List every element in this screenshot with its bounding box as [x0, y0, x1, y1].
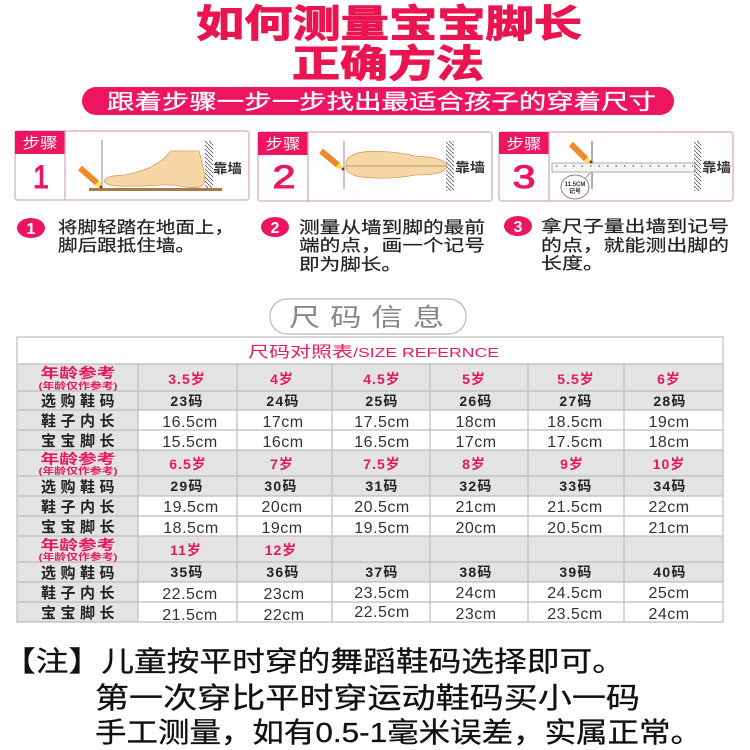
- table block 1 values: 26码: [459, 393, 493, 409]
- table block 2 values: 19.5cm: [354, 520, 410, 537]
- row labels: 鞋子内长: [41, 499, 119, 516]
- table block 1 values: 27码: [559, 393, 593, 409]
- table block 2 values: 18.5cm: [163, 520, 219, 537]
- icon: foot side view: [104, 151, 205, 188]
- table block 2 values: 20.5cm: [547, 520, 603, 537]
- table block 1 values: 18cm: [648, 434, 690, 451]
- instruction 2: 2: [271, 220, 280, 237]
- table block 3 values: [162, 542, 690, 624]
- panel: step 3: [499, 132, 733, 201]
- table block 2 values: 33码: [559, 478, 593, 494]
- panel: step 3: 3: [512, 159, 536, 195]
- table block 1 values: 5.5岁: [557, 371, 595, 387]
- footnote: 【注】儿童按平时穿的舞蹈鞋码选择即可。: [3, 646, 625, 677]
- table block 3 values: 24.5cm: [547, 585, 603, 602]
- instruction 3: 长度。: [541, 254, 604, 273]
- panel: step 2: 步骤: [266, 136, 300, 153]
- panel: step 3: 步骤: [506, 136, 542, 153]
- row labels: 选购鞋码: [41, 478, 119, 496]
- table block 2 values: 10岁: [653, 456, 685, 472]
- table block 1 values: 25码: [365, 393, 399, 409]
- table block 3 values: 24cm: [648, 606, 690, 623]
- instruction 1: [17, 218, 234, 255]
- subtitle banner: [82, 87, 674, 115]
- table block 2 values: 21.5cm: [547, 499, 603, 516]
- panel: step 2: 靠墙: [455, 160, 485, 175]
- table block 3 values: 22.5cm: [354, 604, 410, 621]
- panel: step 3: 靠墙: [702, 160, 731, 175]
- icon: measurement callout: [561, 173, 590, 199]
- table block 1 values: 16.5cm: [354, 434, 410, 451]
- icon: pencil: [80, 168, 102, 188]
- row labels: (年龄仅作参考): [38, 380, 118, 391]
- table block 2 values: 31码: [365, 478, 399, 494]
- row labels: (年龄仅作参考): [38, 465, 118, 476]
- table backgrounds: [17, 337, 723, 622]
- table block 2 values: 7岁: [270, 456, 294, 472]
- row labels: 选购鞋码: [41, 392, 119, 410]
- table block 2 values: 22cm: [648, 499, 690, 516]
- table block 1 values: 4岁: [270, 371, 294, 387]
- icon: ruler: [552, 163, 695, 172]
- table block 2 values: 21cm: [648, 520, 690, 537]
- table block 1 values: 24码: [266, 393, 300, 409]
- table block 2 values: 8岁: [462, 456, 486, 472]
- footnote: 第一次穿比平时穿运动鞋码买小一码: [95, 682, 640, 715]
- table block 1 values: 18.5cm: [547, 414, 603, 431]
- title: 正确方法: [292, 44, 484, 86]
- row labels: (年龄仅作参考): [38, 551, 118, 562]
- table block 2 values: 20cm: [261, 499, 303, 516]
- table block 3 values: 22cm: [263, 607, 305, 624]
- table block 2 values: 6.5岁: [169, 456, 207, 472]
- table block 3 values: 23cm: [455, 606, 497, 623]
- icon: foot top view: [346, 151, 447, 178]
- instruction 2: 即为脚长。: [299, 255, 402, 274]
- icon: measurement callout: 记号: [569, 187, 581, 195]
- row labels: 宝宝脚长: [41, 518, 119, 536]
- icon: pencil: [571, 144, 592, 164]
- table block 3 values: 23.5cm: [354, 585, 410, 602]
- table block 2 values: 30码: [264, 478, 298, 494]
- table block 3 values: 35码: [170, 564, 204, 580]
- table block 1 values: 17.5cm: [547, 434, 603, 451]
- table block 1 values: 16.5cm: [162, 414, 218, 431]
- table block 2 values: 19cm: [261, 520, 303, 537]
- row labels: 选购鞋码: [41, 564, 119, 582]
- table block 3 values: 12岁: [265, 542, 297, 558]
- panel: step 2: [258, 132, 492, 201]
- title: 如何测量宝宝脚长: [196, 4, 582, 46]
- table block 2 values: 20cm: [455, 520, 497, 537]
- row labels: 年龄参考: [40, 537, 116, 553]
- panel: step 2: 2: [272, 159, 296, 195]
- instruction 2: 端的点，画一个记号: [299, 236, 485, 255]
- instruction 3: [504, 216, 729, 273]
- instruction 3: 3: [514, 219, 523, 236]
- row labels: 宝宝脚长: [41, 432, 119, 450]
- table block 1 values: 17.5cm: [354, 414, 410, 431]
- row labels: [38, 365, 119, 622]
- table block 2 values: 20.5cm: [354, 499, 410, 516]
- table block 1 values: 17cm: [262, 414, 304, 431]
- table block 1 values: 23码: [170, 393, 204, 409]
- instruction 3: 拿尺子量出墙到记号: [541, 216, 729, 236]
- row labels: 鞋子内长: [41, 413, 119, 430]
- panel: step 1: 步骤: [22, 135, 58, 152]
- table block 1 values: 18cm: [455, 414, 497, 431]
- table block 3 values: 22.5cm: [162, 586, 218, 603]
- table block 3 values: 38码: [459, 564, 493, 580]
- table block 2 values: 34码: [653, 478, 687, 494]
- table block 2 values: 32码: [459, 478, 493, 494]
- table block 3 values: 23cm: [263, 586, 305, 603]
- instruction 1: 1: [27, 221, 36, 238]
- instruction 1: 脚后跟抵住墙。: [58, 236, 195, 255]
- panel: step 1: 1: [33, 159, 49, 195]
- table block 1 values: 4.5岁: [363, 371, 401, 387]
- table block 1 values: 16cm: [262, 434, 304, 451]
- table block 1 values: 19cm: [648, 414, 690, 431]
- icon: pencil: [321, 151, 344, 170]
- size table: [17, 337, 723, 624]
- table block 1 values: 28码: [653, 393, 687, 409]
- table block 3 values: 36码: [266, 564, 300, 580]
- table block 3 values: 24cm: [455, 585, 497, 602]
- table block 3 values: 21.5cm: [162, 607, 218, 624]
- subtitle banner: 跟着步骤一步一步找出最适合孩子的穿着尺寸: [107, 91, 656, 114]
- table block 1 values: [162, 371, 690, 451]
- table block 1 values: 5岁: [462, 371, 486, 387]
- table block 3 values: 39码: [559, 564, 593, 580]
- table block 2 values: [163, 456, 690, 537]
- table block 3 values: 37码: [365, 564, 399, 580]
- table block 3 values: 40码: [653, 564, 687, 580]
- panel: step 1: 靠墙: [213, 161, 242, 176]
- footnote: [3, 646, 702, 748]
- row labels: 年龄参考: [40, 365, 116, 381]
- table title: 尺码对照表 /SIZE REFERNCE: [248, 343, 499, 361]
- row labels: 鞋子内长: [41, 585, 119, 602]
- instruction 2: [261, 217, 485, 274]
- footnote: 手工测量，如有0.5-1毫米误差，实属正常。: [95, 717, 702, 748]
- table block 2 values: 7.5岁: [363, 456, 401, 472]
- row labels: 年龄参考: [40, 451, 116, 467]
- table block 2 values: 21cm: [455, 499, 497, 516]
- table block 1 values: 3.5岁: [168, 371, 206, 387]
- table block 1 values: 15.5cm: [162, 434, 218, 451]
- table block 1 values: 6岁: [657, 371, 681, 387]
- table block 1 values: 17cm: [455, 434, 497, 451]
- row labels: 宝宝脚长: [41, 604, 119, 622]
- heading: size information: [270, 299, 466, 334]
- icon: measurement callout: 11.5CM: [565, 182, 585, 188]
- table block 3 values: 11岁: [170, 542, 202, 558]
- table block 2 values: 9岁: [560, 456, 584, 472]
- heading: size information: 尺码信息: [289, 303, 454, 331]
- table block 2 values: 19.5cm: [163, 499, 219, 516]
- title: [196, 4, 582, 86]
- panel: step 1: [15, 131, 249, 200]
- instruction 3: 的点，就能测出脚的: [541, 236, 729, 255]
- instruction 1: 将脚轻踏在地面上，: [58, 218, 234, 237]
- table block 3 values: 23.5cm: [547, 606, 603, 623]
- table block 3 values: 25cm: [648, 585, 690, 602]
- instruction 2: 测量从墙到脚的最前: [299, 218, 485, 237]
- table block 2 values: 29码: [170, 478, 204, 494]
